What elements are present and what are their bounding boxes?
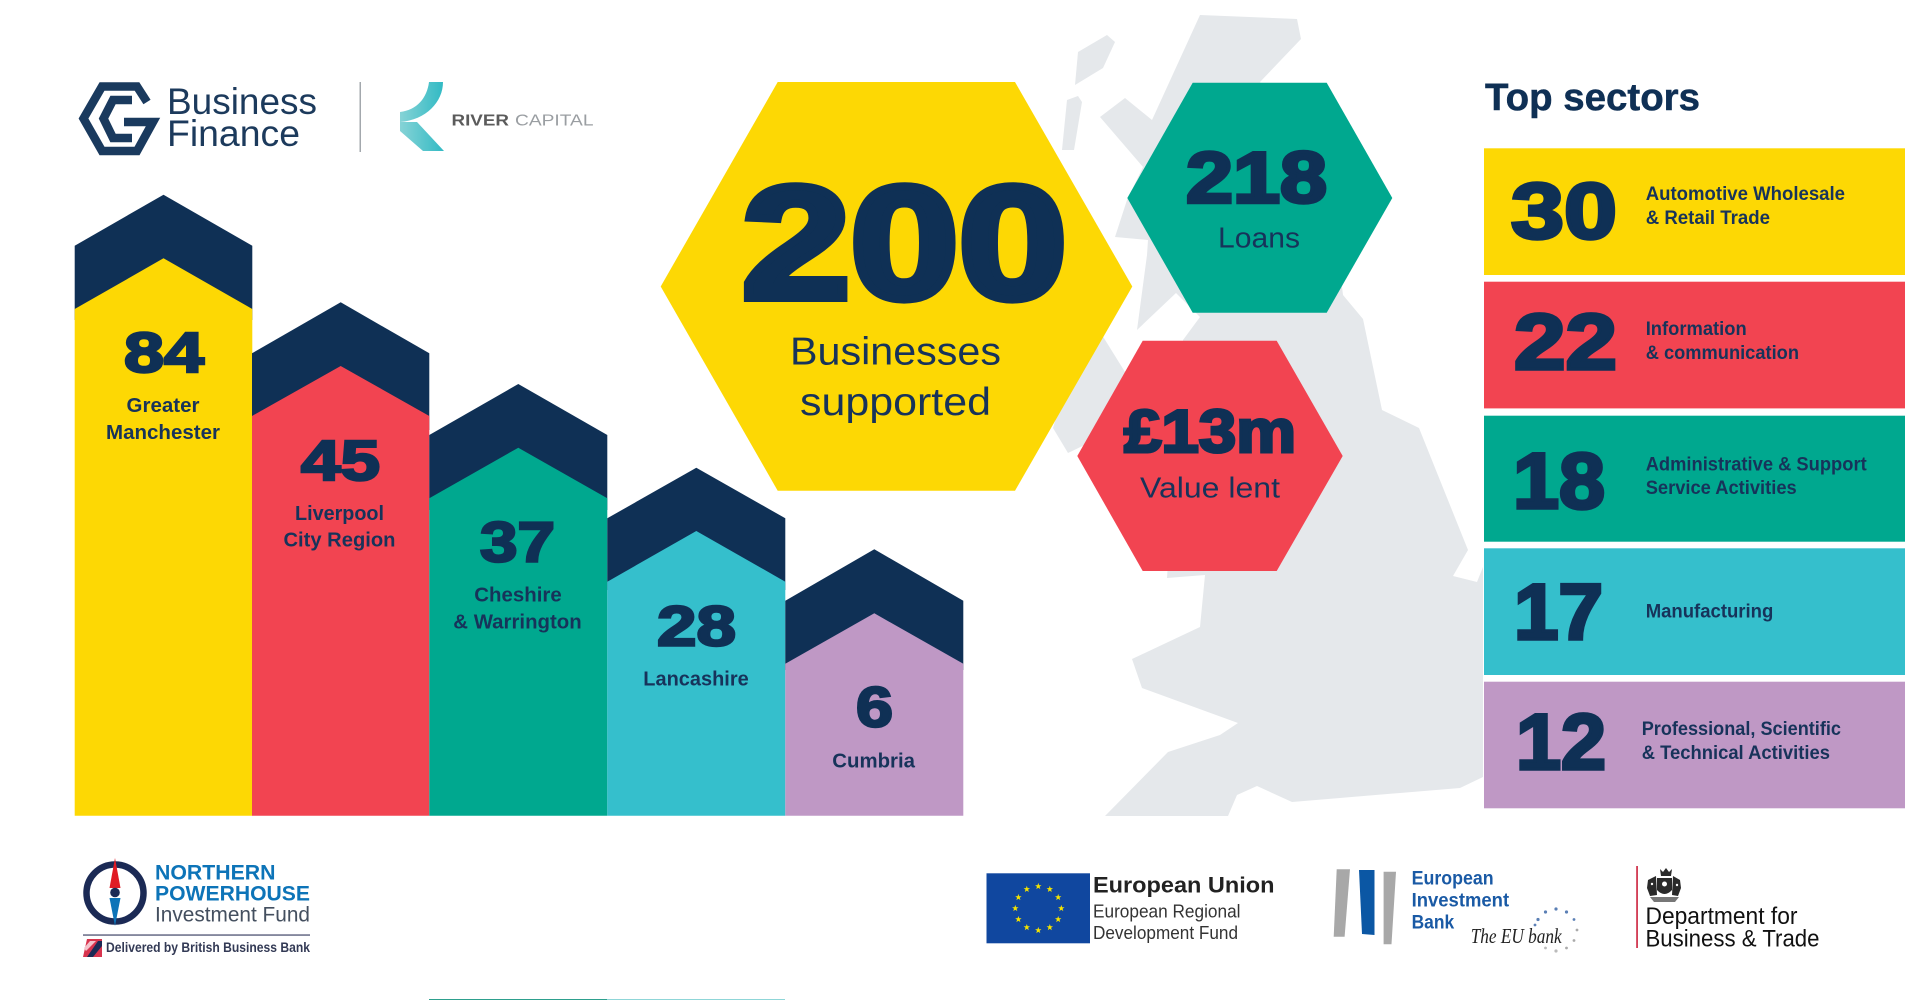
icon: River Capital K [400,82,444,151]
panel: top sectors list [1484,148,1905,808]
icon: Business Finance hexagon G [84,86,153,151]
bar: Liverpool City Region: City Region [284,530,396,552]
bar: Cheshire & Warrington [429,384,607,816]
hexagon: 218 loans: 218 [1186,138,1327,218]
heading: Top sectors: Top sectors [1485,77,1700,119]
sector: Automotive Wholesale & Retail Trade: 30 [1511,166,1617,255]
logo: European Union ERDF: European Regional [1093,901,1240,921]
bar: Liverpool City Region: Liverpool [295,503,384,525]
logo: European Union ERDF: European Union [1093,873,1274,898]
sector: Administrative & Support Service Activities: Service Activities [1646,478,1797,499]
icon: compass [86,858,144,926]
bar: Lancashire [607,468,785,816]
logo: Business Finance [84,81,317,154]
icon: EU flag [986,873,1090,943]
hexagon: £13m value lent: Value lent [1140,473,1280,505]
bar: Greater Manchester: Greater [126,395,200,417]
logo: European Investment Bank: European [1412,868,1494,889]
hexagon: 200 businesses supported: Businesses [790,330,1001,373]
logo: River Capital: RIVER [452,112,510,129]
logo: Department for Business & Trade [1636,866,1820,953]
logo: Northern Powerhouse Investment Fund [83,858,310,957]
chart: stepped regional bars [75,195,963,816]
logo: European Union ERDF: Development Fund [1093,923,1238,943]
sector: Information & communication: Information [1646,319,1747,340]
logo: European Investment Bank: Bank [1412,912,1455,933]
hexagon: £13m value lent [1077,341,1343,571]
sector: Information & communication: 22 [1514,297,1617,386]
logo: Northern Powerhouse Investment Fund: NORTHERN [155,861,276,884]
sector: Automotive Wholesale & Retail Trade: & Retail Trade [1646,208,1770,229]
hexagon: 200 businesses supported: supported [800,381,991,424]
bar: Greater Manchester [75,195,252,816]
logo: European Investment Bank [1334,868,1578,953]
logo: Department for Business & Trade: Department for [1646,903,1798,930]
sector: Manufacturing: Manufacturing [1646,602,1773,623]
bar: Cheshire & Warrington: Cheshire [474,585,562,607]
sector: Professional, Scientific & Technical Activities: 12 [1516,697,1606,786]
sector: Administrative & Support Service Activities: 18 [1513,436,1605,525]
logo: Northern Powerhouse Investment Fund: Investment Fund [155,904,310,927]
logo: Department for Business & Trade: Business & Trade [1646,926,1820,953]
sector: Professional, Scientific & Technical Activities [1484,682,1905,808]
hexagon: £13m value lent: £13m [1124,398,1296,465]
icon: royal crest [1647,868,1681,902]
bar: Cheshire & Warrington: 37 [480,510,555,574]
bar: Cumbria: Cumbria [832,750,916,772]
logo: Business Finance: Finance [167,113,300,154]
sector: Manufacturing: 17 [1514,567,1603,656]
map of the UK background [1053,15,1483,816]
hexagon: 200 businesses supported [661,82,1132,491]
icon: British Business Bank flag [83,939,102,957]
hexagon: 200 businesses supported: 200 [742,153,1067,332]
bar: Lancashire: Lancashire [643,668,749,690]
hexagon: 218 loans: Loans [1218,222,1300,254]
logo: River Capital [400,82,594,151]
logo: European Union ERDF [986,873,1274,943]
logo: Northern Powerhouse Investment Fund: Delivered by British Business Bank [106,939,310,955]
sector: Information & communication: & communication [1646,343,1799,364]
hexagon: 218 loans [1127,83,1392,313]
logo: River Capital: CAPITAL [515,112,594,129]
sector: Professional, Scientific & Technical Activities: & Technical Activities [1642,743,1830,764]
bar: Cumbria [785,549,963,816]
bar: Lancashire: 28 [657,594,736,658]
bar: Liverpool City Region: 45 [301,429,380,493]
sector: Manufacturing [1484,548,1905,675]
bar: Cumbria: 6 [856,676,893,740]
bar: Greater Manchester: 84 [124,321,204,385]
logo: Business Finance: Business [167,81,317,122]
icon: EIB bars [1334,869,1396,944]
sector: Administrative & Support Service Activities [1484,416,1905,542]
logo: European Investment Bank: Investment [1412,891,1510,912]
sector: Automotive Wholesale & Retail Trade [1484,148,1905,275]
sector: Automotive Wholesale & Retail Trade: Automotive Wholesale [1646,184,1845,205]
logo: European Investment Bank: The EU bank [1471,924,1562,948]
logo: Northern Powerhouse Investment Fund: POWERHOUSE [155,883,310,906]
sector: Information & communication [1484,282,1905,408]
bar: Liverpool City Region [252,302,429,816]
sector: Professional, Scientific & Technical Activities: Professional, Scientific [1642,719,1841,740]
icon: EIB star ring [1534,907,1578,953]
bar: Greater Manchester: Manchester [106,422,220,444]
sector: Administrative & Support Service Activities: Administrative & Support [1646,455,1867,476]
bar: Cheshire & Warrington: & Warrington [453,611,582,633]
